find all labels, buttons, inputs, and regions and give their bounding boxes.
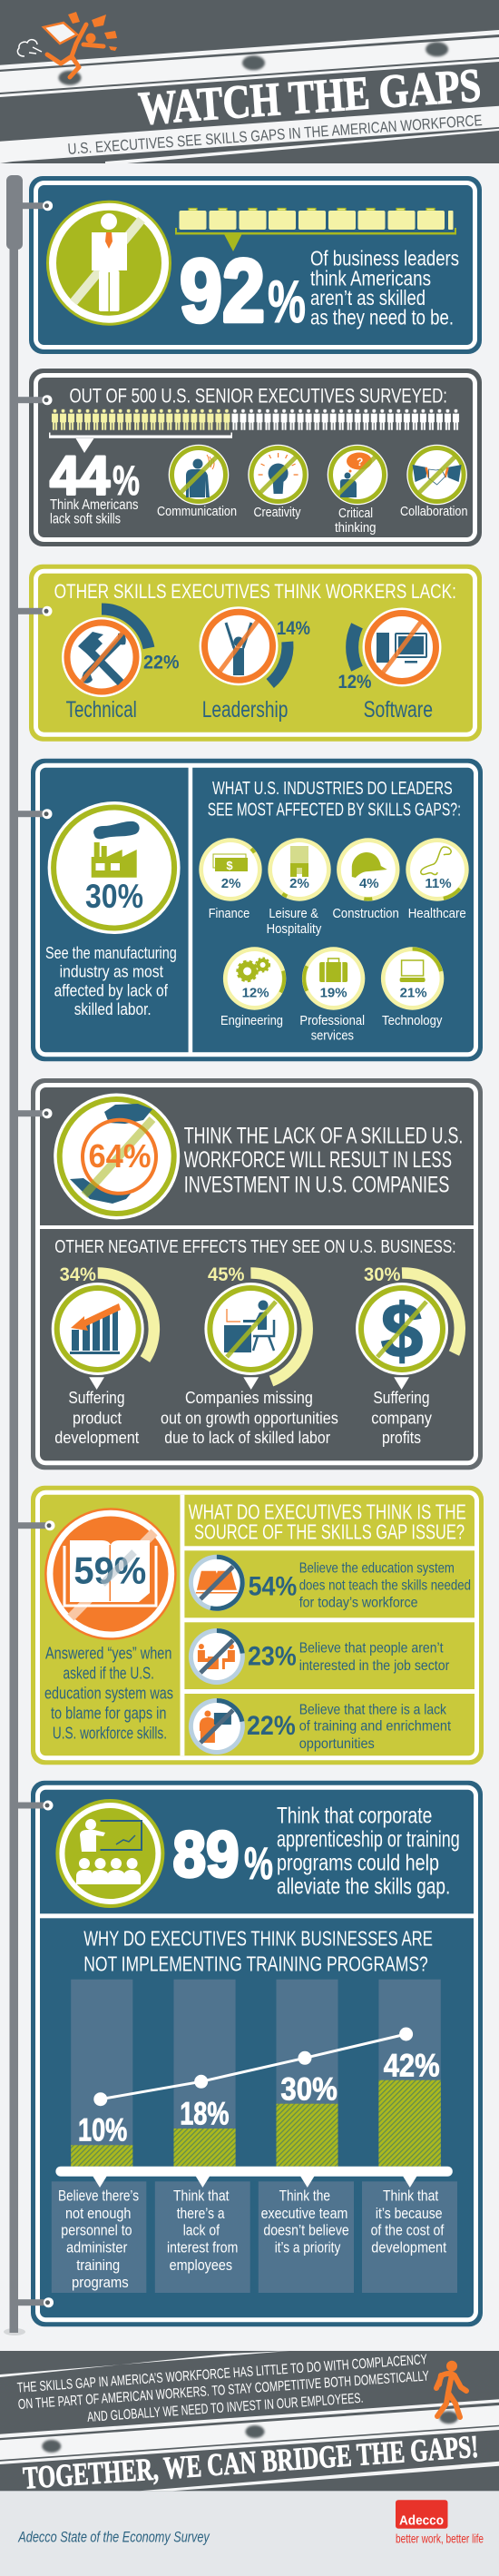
effect labels: company [371,1409,432,1427]
text: training lack: opportunities [299,1736,375,1752]
34 percent: 34% [60,1264,96,1285]
header banner [0,0,499,163]
bar labels: doesn’t believe [263,2222,349,2239]
text: business leaders: think Americans [310,266,431,290]
icon: product development 34% [52,1273,154,1375]
icon: company profits 30%: $ [381,1288,423,1373]
icon: healthcare 11%: 11% [425,876,452,891]
panel: 92 percent [29,176,482,354]
text: training lack: Believe that there is a lack [299,1702,447,1717]
pictogram of people [49,409,460,453]
skill labels [157,505,468,536]
icon: engineering 12%: 12% [242,985,269,1000]
industry labels: Finance [209,907,250,921]
labels [66,697,433,723]
bar labels: personnel to [61,2222,132,2239]
icon: creativity [248,445,308,505]
signpost connectors [15,201,54,2307]
bar labels: there’s a [177,2205,225,2222]
icon: leisure 2%: 2% [289,876,309,891]
icon: construction 4%: 4% [359,876,379,891]
labels: Technical [66,697,137,723]
icon: engineering 12% [223,947,286,1010]
text: education system [299,1560,471,1611]
23 percent: 23% [248,1641,297,1671]
industry labels: Leisure & [269,907,318,921]
text: answered yes: asked if the U.S. [64,1664,154,1682]
text: apprenticeship [277,1803,460,1900]
text: training lack [299,1702,452,1752]
bar labels: not enough [65,2205,131,2222]
big number 44%: 44 [50,445,111,506]
icon: technology 21% [381,947,444,1010]
text: answered yes: to blame for gaps in [51,1704,166,1722]
industry labels: Professional [299,1014,365,1028]
text: apprenticeship: programs could help [277,1851,439,1876]
icon: book 59%: 59% [73,1549,146,1591]
effect labels: out on growth opportunities [161,1409,338,1427]
text: answered yes [44,1644,173,1742]
icon: company profits 30% [356,1273,460,1375]
icon: critical thinking: ? [357,456,363,468]
effect labels: Suffering [373,1389,430,1407]
bar labels: administer [66,2239,128,2256]
skill labels: Critical [338,506,373,521]
logo: Adecco: Adecco [399,2513,444,2529]
icon: training 22% [189,1698,245,1755]
industry labels: Healthcare [408,907,466,921]
effect labels: Suffering [68,1389,125,1407]
text: less investment [184,1123,463,1197]
text: job sector: Believe that people aren’t [299,1641,444,1657]
big number 44%: % [113,457,140,504]
effect labels: profits [382,1429,421,1447]
bar labels: Think the [279,2187,330,2204]
industry labels: services [311,1029,354,1044]
icon: running figure dropping book and papers [17,12,117,77]
text: job sector: interested in the job sector [299,1658,450,1674]
bar chart [55,1980,453,2177]
closing text [16,2352,429,2425]
labels: Software [364,697,433,723]
big number 92%: % [268,268,306,335]
text: manufacturing: industry as most [60,963,163,981]
bar labels [58,2187,446,2291]
labels: Leadership [202,697,288,723]
bar chart: 30% [280,2071,338,2107]
bar chart: 10% [78,2112,127,2148]
icon: growth opportunities 45% [204,1273,308,1381]
icon: technology 21%: 21% [400,985,427,1000]
text: soft skills: Think Americans [50,497,139,513]
icon: classroom [55,1799,164,1908]
icon: healthcare 11% [406,838,469,901]
bar labels: employees [170,2256,232,2274]
industry labels: Engineering [220,1014,283,1028]
text: answered yes: U.S. workforce skills. [53,1724,167,1742]
icon: collaboration [406,445,467,505]
icon: 64 percent hands: 64% [89,1137,151,1175]
bar labels: training [76,2256,120,2274]
bar labels: it’s a priority [275,2239,341,2256]
big number 89%: % [244,1838,273,1889]
bar labels: Think that [173,2187,230,2204]
label boxes [52,2181,457,2293]
big number 92%: 92 [180,241,265,340]
bar chart: 18% [180,2097,229,2132]
icon: leisure 2% [268,838,331,901]
bar labels: development [371,2239,446,2256]
bar labels: Believe there’s [58,2187,139,2204]
icon: software 12% [352,608,441,686]
closing banner [0,2351,499,2491]
skill labels: thinking [335,521,376,536]
bar labels: it’s because [376,2205,443,2222]
industry labels [209,907,466,1044]
heading: industries [208,779,461,820]
icon: professional services 19% [302,947,365,1010]
heading: why not implementing [83,1926,433,1976]
22 percent: 22% [143,653,180,673]
text: soft skills: lack soft skills [50,512,121,527]
panel: source of the skills gap [31,1486,484,1765]
closing text: AND GLOBALLY WE NEED TO INVEST IN OUR EMPLOYEES. [87,2391,364,2425]
text: business leaders: as they need to be. [310,305,454,329]
12 percent: 12% [338,672,372,693]
effect labels: due to lack of skilled labor [164,1429,330,1447]
text: business leaders [310,247,459,329]
icon: professional services 19%: 19% [320,985,347,1000]
bar chart: 42% [384,2048,440,2083]
text: manufacturing [45,944,177,1018]
54 percent: 54% [249,1571,297,1601]
skill labels: Collaboration [400,505,468,519]
panel: training programs [31,1781,483,2326]
effect labels [54,1389,432,1447]
logo: Adecco [396,2500,484,2546]
text: manufacturing: See the manufacturing [45,944,177,962]
icon: finance 2%: $ [226,859,233,872]
big number 89%: 89 [172,1819,240,1892]
panel: 500 executives surveyed [29,369,482,546]
icon: open book 54% [189,1555,245,1611]
text: business leaders: Of business leaders [310,247,459,270]
icon: communication [169,445,229,505]
pointers [89,1377,409,1390]
icon: factory 30% [48,801,181,934]
icon: critical thinking [328,445,387,505]
bar labels: interest from [167,2239,238,2256]
icon: 64 percent hands [54,1093,180,1220]
text: answered yes: Answered “yes” when [45,1644,171,1662]
text: business leaders: aren’t as skilled [310,286,426,310]
icon: interview 23% [189,1628,245,1685]
icon: technical 22% [62,609,149,697]
icon: book 59% [44,1508,177,1640]
text: training lack: of training and enrichment [299,1719,452,1735]
icon: factory 30%: 30% [85,878,143,915]
bar labels: programs [72,2274,129,2291]
icon: finance 2%: 2% [221,876,240,891]
panel: investment and negative effects [31,1078,483,1470]
30 percent: 30% [364,1264,401,1285]
industry labels: Construction [332,907,399,921]
22 percent: 22% [247,1711,296,1741]
icon: crossed-out businessman [46,201,171,326]
text: soft skills [50,497,139,527]
text: education system: for today’s workforce [299,1596,418,1611]
industry labels: Hospitality [267,922,322,937]
text: apprenticeship: Think that corporate [277,1803,432,1828]
briefcase bar chart [175,209,456,251]
icon: finance 2% [199,838,262,901]
panel: other skills [29,565,482,742]
bar labels: Think that [383,2187,439,2204]
industry labels: Technology [382,1014,443,1028]
45 percent: 45% [208,1264,245,1285]
text: manufacturing: affected by lack of [54,982,169,1000]
bar labels: executive team [261,2205,347,2222]
footer background [0,2491,499,2576]
text: job sector [299,1641,450,1674]
heading: source of the gap [189,1499,466,1544]
skill labels: Communication [157,505,237,519]
effect labels: development [54,1429,139,1447]
skill labels: Creativity [254,506,301,520]
source note: Adecco State of the Economy Survey [18,2529,210,2546]
bar labels: of the cost of [371,2222,445,2239]
big number 44% [50,445,140,506]
text: manufacturing: skilled labor. [74,1000,152,1018]
effect labels: product [73,1409,122,1427]
text: education system: Believe the education system [299,1560,455,1576]
bar labels: lack of [183,2222,220,2239]
icon: leadership 14% [200,606,288,685]
pointers [93,2176,417,2188]
panel: industries [31,759,483,1061]
text: apprenticeship: alleviate the skills gap. [277,1874,450,1900]
icon: walking figure [436,2361,466,2417]
14 percent: 14% [277,618,310,639]
effect labels: Companies missing [185,1389,313,1407]
text: answered yes: education system was [44,1684,173,1702]
icon: construction 4% [337,838,399,901]
signpost pole [4,175,25,2335]
